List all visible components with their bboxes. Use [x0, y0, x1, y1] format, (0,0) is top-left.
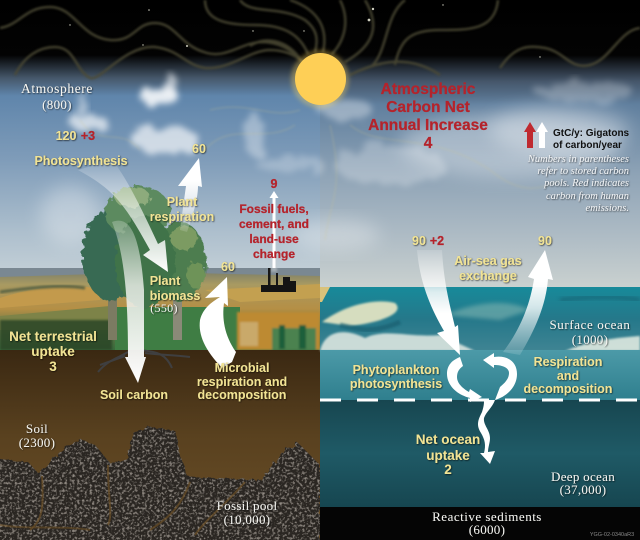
- text: phytoplankton photosynthesis: photosynthesis: [350, 377, 442, 391]
- text: air-sea gas exchange: exchange: [459, 269, 517, 283]
- ocean surface with waves: [320, 287, 640, 351]
- text: soil pool: [19, 421, 55, 450]
- text: deep ocean pool: Deep ocean: [551, 469, 615, 484]
- note about parentheses: pools. Red indicates: [543, 178, 629, 189]
- arrow: microbial respiration: [200, 277, 236, 368]
- text: plant biomass: Plant: [150, 274, 181, 288]
- icon: red arrow: [524, 122, 536, 148]
- text: net ocean uptake: 2: [444, 462, 452, 477]
- text: microbial respiration: [197, 361, 287, 402]
- note about parentheses: Numbers in parentheses: [527, 154, 629, 165]
- text: phytoplankton photosynthesis: Phytoplankton: [353, 363, 439, 377]
- text: microbial respiration: Microbial: [215, 361, 269, 375]
- title: atmospheric carbon net annual increase: Carbon Net: [386, 99, 470, 116]
- text: soil pool: (2300): [19, 435, 55, 450]
- land and horizon: [0, 268, 320, 350]
- text: soil carbon: Soil carbon: [100, 388, 168, 402]
- stars: [69, 4, 541, 58]
- text: microbial respiration: decomposition: [198, 388, 286, 402]
- text: 90 +2 flux: [412, 234, 444, 248]
- arrow: plant respiration: [178, 158, 202, 232]
- text: 120 +3 flux: 120: [56, 129, 76, 143]
- text: net ocean uptake: [416, 432, 480, 477]
- text: plant respiration: [150, 195, 214, 224]
- text: surface ocean pool: Surface ocean: [549, 317, 631, 332]
- note about parentheses: carbon from human: [546, 191, 629, 202]
- note about parentheses: [527, 154, 629, 214]
- faint sun rays over the sky: [80, 107, 560, 240]
- text: respiration and decomposition: and: [557, 369, 579, 383]
- note about parentheses: emissions.: [586, 203, 629, 214]
- text: net terrestrial uptake: uptake: [31, 344, 75, 359]
- reactive sediments band: [320, 507, 640, 540]
- crop field: [237, 312, 320, 350]
- text: surface ocean pool: (1000): [572, 332, 608, 347]
- trees: [82, 186, 206, 340]
- text: net ocean uptake: uptake: [426, 448, 470, 463]
- wavy sun rays: [0, 0, 640, 78]
- text: soil pool: Soil: [26, 421, 48, 436]
- text: 90 +2 flux: 90: [412, 234, 426, 248]
- title: atmospheric carbon net annual increase: Atmospheric: [381, 81, 476, 98]
- text: 60 microbial flux: 60: [221, 260, 235, 274]
- sun: [291, 50, 349, 108]
- text: microbial respiration: respiration and: [197, 375, 287, 389]
- arrow: fossil fuel emissions: [270, 191, 278, 268]
- text: photosynthesis: Photosynthesis: [34, 154, 128, 168]
- arrow: air-sea gas exchange, out of ocean: [503, 250, 553, 355]
- deep ocean: [320, 400, 640, 507]
- text: fossil pool: (10,000): [224, 512, 270, 527]
- text: surface ocean pool: [549, 317, 631, 347]
- sky background: right: [320, 0, 640, 290]
- text: air-sea gas exchange: Air-sea gas: [454, 254, 522, 268]
- text: fossil fuels flux and label: change: [253, 247, 295, 261]
- shallow ocean: [320, 350, 640, 400]
- text: 60 plant respiration flux: 60: [192, 142, 206, 156]
- roots: [98, 350, 190, 372]
- text: fossil fuels flux and label: 9: [271, 177, 278, 191]
- text: net ocean uptake: Net ocean: [416, 432, 480, 447]
- text: fossil fuels flux and label: cement, and: [239, 217, 309, 231]
- text: 120 +3 flux: +3: [81, 129, 95, 143]
- text: 90 flux: 90: [538, 234, 552, 248]
- arrow: net ocean uptake: [478, 400, 495, 464]
- text: 90 +2 flux: +2: [430, 234, 444, 248]
- text: plant biomass: (550): [150, 301, 178, 315]
- legend: [524, 122, 630, 151]
- text: plant respiration: Plant: [167, 195, 198, 209]
- text: respiration and decomposition: [524, 355, 612, 396]
- text: air-sea gas exchange: [454, 254, 522, 283]
- arrow: air-sea gas exchange, into ocean: [417, 250, 460, 355]
- factory with smokestack: [261, 190, 296, 292]
- arrow: carbon into soil: [112, 221, 146, 383]
- text: plant biomass: [150, 274, 200, 315]
- sky background: left: [0, 0, 320, 290]
- note about parentheses: refer to stored carbon: [537, 166, 629, 177]
- text: reactive sediments pool: [432, 509, 542, 537]
- icon: white arrow: [536, 122, 548, 148]
- text: 120 +3 flux: [56, 129, 95, 143]
- title: atmospheric carbon net annual increase: Annual Increase: [368, 117, 488, 134]
- text: net terrestrial uptake: [9, 329, 97, 374]
- text: atmosphere pool: [21, 81, 93, 112]
- text: deep ocean pool: [551, 469, 615, 497]
- soil: [0, 350, 320, 540]
- arrow: phytoplankton cycle: [447, 353, 517, 402]
- text: deep ocean pool: (37,000): [560, 482, 606, 497]
- legend text: of carbon/year: [553, 140, 622, 151]
- text: fossil fuels flux and label: [239, 177, 309, 261]
- text: fossil fuels flux and label: land-use: [249, 232, 299, 246]
- text: respiration and decomposition: Respiration: [534, 355, 602, 369]
- text: plant respiration: respiration: [150, 210, 214, 224]
- arrow: photosynthesis: [78, 160, 168, 272]
- text: net terrestrial uptake: 3: [49, 359, 57, 374]
- text: fossil fuels flux and label: Fossil fuels,: [239, 202, 309, 216]
- text: reactive sediments pool: Reactive sediments: [432, 509, 542, 524]
- title: atmospheric carbon net annual increase: [368, 81, 488, 152]
- text: atmosphere pool: (800): [42, 97, 72, 112]
- text: atmosphere pool: Atmosphere: [21, 81, 93, 96]
- text: reactive sediments pool: (6000): [469, 522, 505, 537]
- clouds: [40, 76, 635, 251]
- text: fossil pool: [217, 498, 277, 527]
- legend text: GtC/y: Gigatons: [553, 128, 630, 139]
- title: atmospheric carbon net annual increase: 4: [424, 135, 433, 152]
- text: net terrestrial uptake: Net terrestrial: [9, 329, 97, 344]
- dashed thermocline line: [320, 398, 640, 402]
- text: figure code: YGG-02-0340aR3: [590, 532, 634, 538]
- text: plant biomass: biomass: [150, 289, 200, 303]
- fossil pool rock: [0, 427, 320, 540]
- text: phytoplankton photosynthesis: [350, 363, 442, 391]
- text: respiration and decomposition: decomposition: [524, 382, 612, 396]
- text: fossil pool: Fossil pool: [217, 498, 277, 513]
- legend text: [553, 128, 630, 151]
